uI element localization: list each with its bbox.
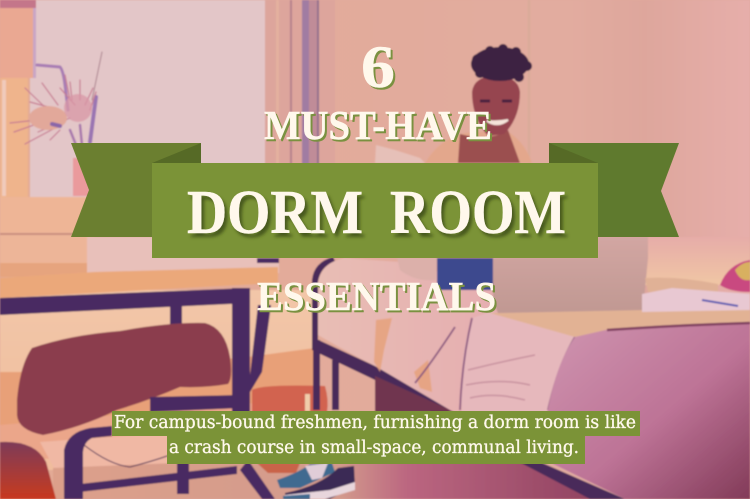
hair xyxy=(471,44,532,82)
papers and pen on bed xyxy=(642,278,750,312)
seam shadow xyxy=(607,323,750,330)
bedcover xyxy=(545,324,750,499)
headline number 6: 6 xyxy=(361,34,395,100)
orange bag under bed xyxy=(252,386,328,473)
desk top xyxy=(0,237,279,298)
person xyxy=(375,44,532,163)
charging cable xyxy=(84,445,170,467)
subtitle highlight: line 1 xyxy=(112,411,640,436)
ribbon main panel xyxy=(152,163,598,258)
window xyxy=(30,0,265,200)
pillow xyxy=(397,258,437,280)
subtitle line 1: For campus-bound freshmen, furnishing a dorm room is like xyxy=(114,413,636,433)
ribbon tail: left xyxy=(71,143,201,237)
ribbon banner xyxy=(71,143,679,258)
quilt wrinkles xyxy=(466,355,535,400)
headline shadow: ROOM xyxy=(393,183,569,251)
ribbon tail: right xyxy=(549,143,679,237)
eyes xyxy=(480,100,512,102)
neck and face xyxy=(472,76,520,136)
shoes xyxy=(277,463,355,499)
backpack on stool xyxy=(17,323,231,435)
wall below desk xyxy=(0,290,315,470)
headline line: ESSENTIALS: ESSENTIALS xyxy=(259,275,498,321)
colorful pillow xyxy=(720,260,750,292)
curtains xyxy=(265,0,335,165)
door edge line xyxy=(528,0,530,165)
stacked books xyxy=(0,197,95,277)
headline line: MUST-HAVE: MUST-HAVE xyxy=(266,104,494,150)
ribbon fold: left xyxy=(152,143,201,163)
orange folds of bedding xyxy=(374,318,432,392)
headline word: DORM: DORM xyxy=(187,179,363,247)
bedspread quilt xyxy=(461,312,600,412)
headline number 6: 6 xyxy=(363,36,397,102)
subtitle highlight: line 2 xyxy=(167,436,585,464)
laptop xyxy=(493,237,648,313)
torso and cardigan xyxy=(425,130,532,163)
jeans xyxy=(437,258,493,290)
headline line: MUST-HAVE: MUST-HAVE xyxy=(264,102,492,148)
plant in vase xyxy=(10,52,102,145)
subtitle line 2: a crash course in small-space, communal living. xyxy=(169,438,579,458)
baseboard xyxy=(0,348,315,428)
smile xyxy=(487,120,508,124)
bed mattress xyxy=(318,258,750,499)
ribbon fold: right xyxy=(549,143,598,163)
carpet xyxy=(53,462,625,499)
shelf unit at far left xyxy=(0,0,36,198)
headline line: ESSENTIALS: ESSENTIALS xyxy=(257,273,496,319)
headline: DORM ROOM xyxy=(187,179,569,251)
wall beside laptop xyxy=(598,237,750,285)
headline shadow: DORM xyxy=(190,183,366,251)
duvet behind person xyxy=(375,145,425,163)
desk frame xyxy=(0,258,279,499)
maroon shadow below bed xyxy=(375,376,455,412)
heater at bottom-left xyxy=(0,442,56,499)
bedspread seams xyxy=(415,318,575,410)
headline shadow xyxy=(190,183,569,251)
stool xyxy=(64,395,275,499)
bed frame xyxy=(312,257,625,499)
headline word: ROOM: ROOM xyxy=(390,179,566,247)
vase xyxy=(73,158,90,196)
subtitle text block xyxy=(112,411,640,464)
tan blanket xyxy=(490,310,750,337)
